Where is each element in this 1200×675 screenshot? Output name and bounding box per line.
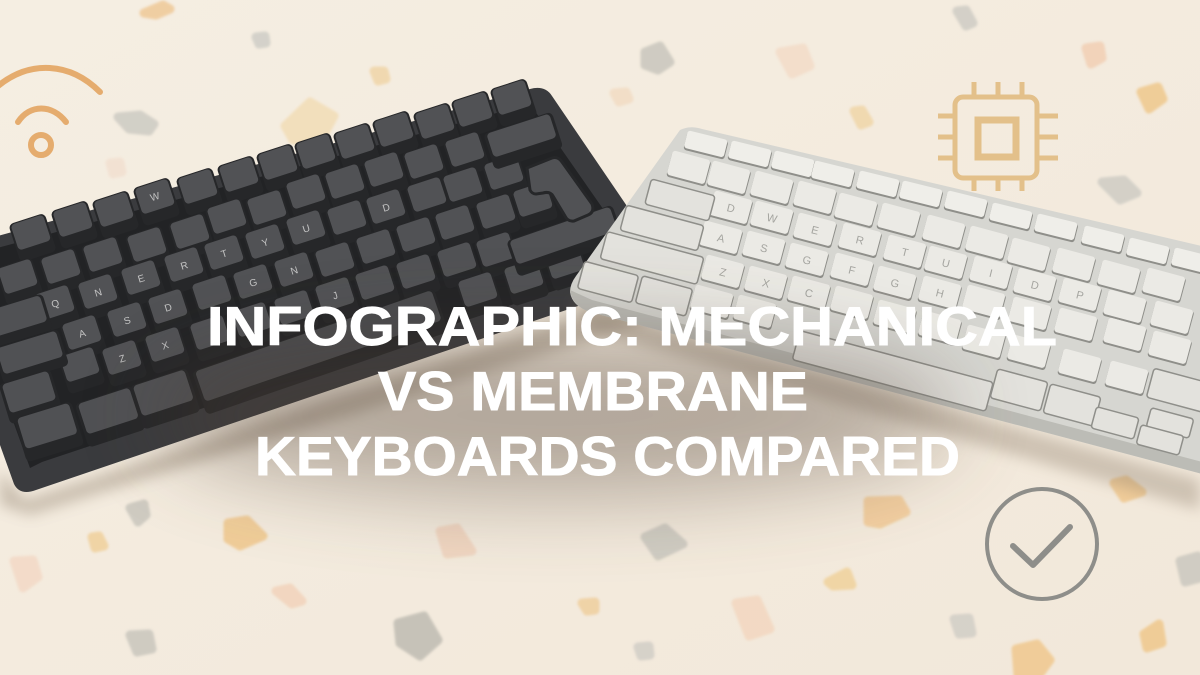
white key legends: D	[1029, 279, 1040, 293]
wide dark keys	[0, 112, 624, 462]
dark keys	[0, 78, 591, 395]
dark key legends: N	[289, 265, 300, 278]
white key legends: Z	[718, 266, 728, 280]
title: INFOGRAPHIC: MECHANICAL	[207, 295, 1057, 357]
dark key legends: T	[220, 248, 229, 261]
dark key legends: E	[137, 273, 147, 286]
wide white keys	[577, 179, 1200, 455]
dark key legends: S	[123, 315, 133, 328]
title backdrop shading	[155, 335, 955, 495]
dark key legends: R	[179, 260, 190, 273]
title	[207, 295, 1057, 487]
dark key legends: D	[381, 202, 392, 215]
membrane keyboard	[570, 127, 1200, 510]
white key legends: P	[1075, 289, 1085, 303]
silver frame	[570, 127, 1200, 476]
white key legends: C	[803, 287, 814, 301]
lower lip	[570, 290, 1200, 476]
white key legends: U	[940, 257, 951, 271]
dark key legends: N	[93, 287, 104, 300]
white key legends: W	[765, 212, 779, 226]
dark key legends: Y	[261, 237, 271, 250]
white key legends: A	[716, 232, 726, 246]
dark key legends: X	[161, 340, 171, 353]
white key legends: E	[810, 224, 820, 238]
white key legends	[716, 202, 1085, 303]
dark key legends: G	[248, 277, 259, 290]
mechanical keyboard	[0, 78, 660, 515]
title: KEYBOARDS COMPARED	[255, 425, 960, 487]
white key legends: R	[854, 234, 865, 248]
dark key legends	[50, 191, 392, 366]
white key legends: S	[759, 242, 769, 256]
white key legends: T	[900, 246, 910, 260]
icon: wifi	[0, 68, 100, 155]
dark key legends: U	[301, 223, 312, 236]
white key legends: I	[988, 268, 994, 280]
dark key legends: Z	[118, 353, 127, 366]
key well	[0, 104, 640, 468]
dark frame	[0, 88, 653, 492]
dark key legends: D	[163, 302, 174, 315]
white key legends: H	[934, 287, 945, 301]
keyboard shadow	[570, 300, 1200, 510]
white key legends: D	[725, 202, 736, 216]
dark key legends: A	[78, 328, 88, 341]
function row keys	[683, 130, 1200, 277]
icon: chip	[938, 82, 1058, 191]
white keys	[666, 150, 1195, 397]
dark key legends: J	[331, 290, 339, 302]
dark key legends: W	[149, 191, 162, 204]
keyboard shadow	[0, 288, 660, 515]
white key legends: G	[889, 277, 900, 291]
icon: check circle	[987, 489, 1097, 599]
white key legends: X	[761, 277, 771, 291]
title: VS MEMBRANE	[378, 360, 808, 422]
dark key legends: Q	[50, 298, 61, 311]
white key legends: G	[801, 254, 812, 268]
white key legends: F	[847, 264, 857, 278]
